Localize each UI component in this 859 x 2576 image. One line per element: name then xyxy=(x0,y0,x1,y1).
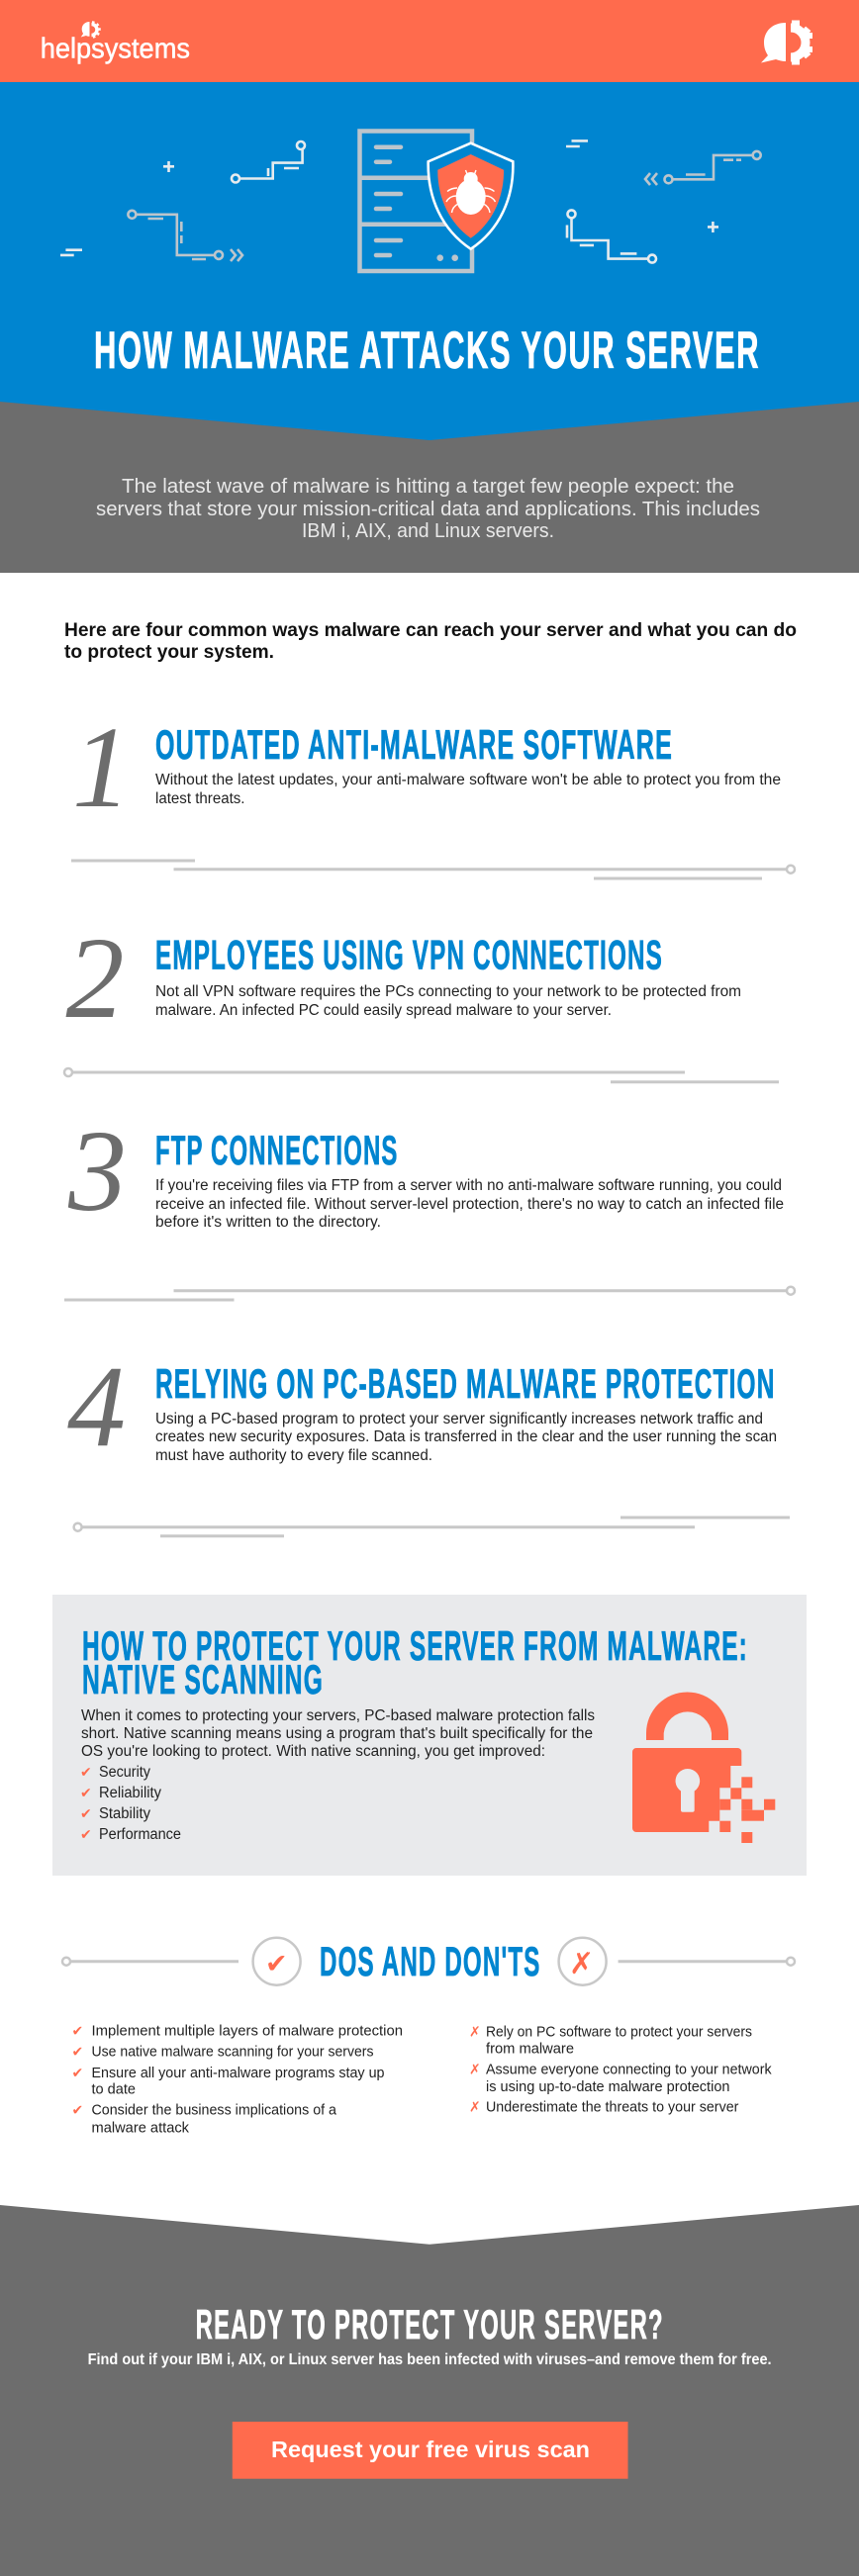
text 4 xyxy=(155,1411,777,1464)
item 3 xyxy=(67,1106,784,1236)
native scanning text: When it comes to protecting your servers, PC-based malware protection falls xyxy=(81,1707,595,1724)
dos list: ✔ xyxy=(71,2103,83,2119)
don'ts list: Rely on PC software to protect your servers xyxy=(486,2024,752,2041)
don'ts list: Underestimate the threats to your server xyxy=(486,2099,738,2116)
icon: check badge xyxy=(253,1938,301,1985)
number 2: 2 xyxy=(65,913,125,1043)
benefits list: ✔ xyxy=(80,1806,92,1822)
benefits list: Stability xyxy=(99,1805,150,1822)
don'ts list: from malware xyxy=(486,2041,574,2058)
header band xyxy=(0,0,859,82)
intro text: IBM i, AIX, and Linux servers. xyxy=(302,520,554,542)
intro text: The latest wave of malware is hitting a target few people expect: the xyxy=(122,476,734,498)
text 3: receive an infected file. Without server-level protection, there's no way to catch an infected file xyxy=(155,1196,784,1213)
icon: padlock xyxy=(632,1692,775,1843)
number 1: 1 xyxy=(72,702,131,832)
button: Request your free virus scan xyxy=(271,2437,590,2462)
text 1 xyxy=(155,772,781,807)
intro panel xyxy=(0,402,859,573)
heading 3: FTP CONNECTIONS xyxy=(155,1127,398,1173)
text 2: Not all VPN software requires the PCs connecting to your network to be protected from xyxy=(155,983,741,1000)
hero panel xyxy=(0,82,859,445)
text 3: If you're receiving files via FTP from a server with no anti-malware software running, you could xyxy=(155,1177,782,1194)
text 2: malware. An infected PC could easily spread malware to your server. xyxy=(155,1002,612,1019)
panel: native scanning xyxy=(52,1595,807,1876)
benefits list: Security xyxy=(99,1764,150,1781)
text 1: Without the latest updates, your anti-malware software won't be able to protect you from the xyxy=(155,772,781,788)
circuit: top right xyxy=(645,151,761,185)
intro text xyxy=(96,476,760,542)
icon: x badge: ✗ xyxy=(569,1947,594,1981)
text 4: creates new security exposures. Data is transferred in the clear and the user running the scan xyxy=(155,1428,777,1445)
call to action panel xyxy=(0,2205,859,2576)
dos list: ✔ xyxy=(71,2024,83,2040)
cta subtext: Find out if your IBM i, AIX, or Linux server has been infected with viruses–and remove them for free. xyxy=(88,2351,772,2368)
benefits list: ✔ xyxy=(80,1827,92,1843)
icon: check badge: ✔ xyxy=(265,1949,288,1979)
icon: helpsystems mark xyxy=(761,20,812,65)
circuit: bottom left xyxy=(128,211,242,261)
don'ts list: ✗ xyxy=(469,2063,481,2078)
lead paragraph xyxy=(64,620,797,663)
lead paragraph: to protect your system. xyxy=(64,642,274,663)
benefits list: Performance xyxy=(99,1826,181,1843)
benefits list: ✔ xyxy=(80,1786,92,1801)
text 4: Using a PC-based program to protect your server significantly increases network traffic and xyxy=(155,1411,763,1427)
text 3 xyxy=(155,1177,784,1231)
item 4 xyxy=(67,1341,777,1471)
dos list: to date xyxy=(91,2081,136,2098)
heading: dos and don'ts: DOS AND DON'TS xyxy=(320,1938,540,1984)
logo: helpsystems: helpsystems xyxy=(41,33,190,64)
heading: native scanning xyxy=(82,1622,748,1702)
benefits list: Reliability xyxy=(99,1785,161,1801)
text 2 xyxy=(155,983,741,1019)
number 3: 3 xyxy=(67,1106,127,1236)
dos list: malware attack xyxy=(91,2120,189,2137)
decorative marks xyxy=(60,140,718,255)
dos and don'ts header xyxy=(62,1938,795,1985)
text 4: must have authority to every file scanned. xyxy=(155,1447,432,1464)
don'ts list: ✗ xyxy=(469,2025,481,2041)
item 2 xyxy=(65,913,741,1043)
native scanning text xyxy=(81,1707,595,1760)
benefits list: ✔ xyxy=(80,1765,92,1781)
circuit: top left xyxy=(232,141,305,182)
lead paragraph: Here are four common ways malware can reach your server and what you can do xyxy=(64,620,797,641)
don'ts list: is using up-to-date malware protection xyxy=(486,2078,730,2095)
dos list: Consider the business implications of a xyxy=(91,2102,337,2119)
item 1 xyxy=(72,702,781,832)
dos list: ✔ xyxy=(71,2045,83,2061)
intro text: servers that store your mission-critical data and applications. This includes xyxy=(96,499,760,520)
don'ts list: Assume everyone connecting to your network xyxy=(486,2062,772,2078)
icon: bug xyxy=(446,170,495,215)
dos list: Implement multiple layers of malware protection xyxy=(91,2023,403,2040)
dos list xyxy=(71,2023,403,2137)
benefits list xyxy=(80,1764,181,1843)
don'ts list xyxy=(469,2024,772,2116)
dos list: Ensure all your anti-malware programs stay up xyxy=(91,2065,384,2081)
dos list: Use native malware scanning for your servers xyxy=(91,2044,374,2061)
don'ts list: ✗ xyxy=(469,2100,481,2116)
circuit: bottom right xyxy=(567,210,656,263)
number 4: 4 xyxy=(67,1341,126,1471)
heading: native scanning: NATIVE SCANNING xyxy=(82,1656,324,1702)
native scanning text: OS you're looking to protect. With native scanning, you get improved: xyxy=(81,1743,545,1760)
dos list: ✔ xyxy=(71,2066,83,2081)
icon: x badge xyxy=(559,1938,607,1985)
native scanning text: short. Native scanning means using a program that's built specifically for the xyxy=(81,1725,593,1742)
text 1: latest threats. xyxy=(155,790,245,807)
button xyxy=(233,2422,628,2479)
shield with bug xyxy=(429,143,513,249)
server icon xyxy=(360,131,472,271)
text 3: before it's written to the directory. xyxy=(155,1214,381,1231)
